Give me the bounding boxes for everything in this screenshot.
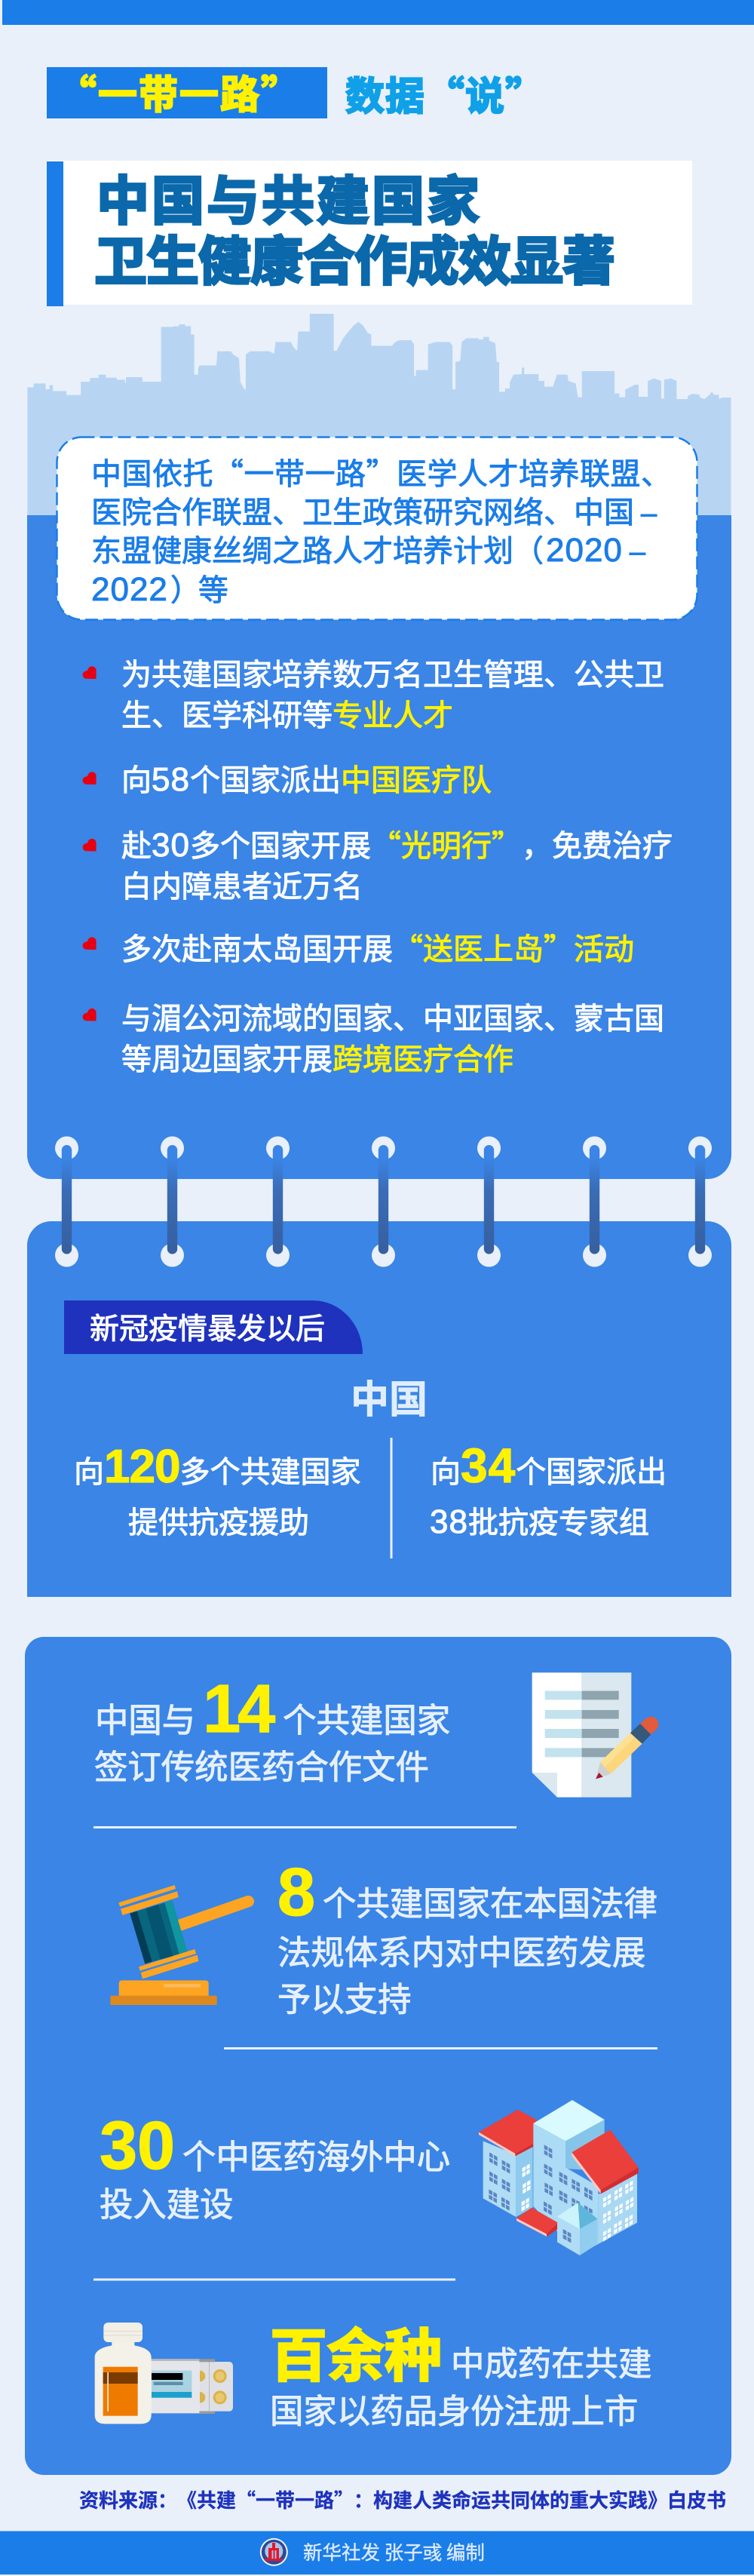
divider: [391, 1438, 392, 1558]
bullet 3 text: [121, 821, 673, 906]
bullet 3 text: 白内障患者近万名: [121, 862, 363, 906]
bullet 2 text: 向58个国家派出中国医疗队: [121, 756, 492, 800]
callout: dashed intro box: [57, 438, 697, 620]
callout: dashed intro box: 医院合作联盟、卫生政策研究网络、中国 –: [91, 488, 657, 532]
item: 14 countries text: 签订传统医药合作文件: [94, 1739, 429, 1788]
stat: 34 countries: 38批抗疫专家组: [430, 1498, 649, 1542]
item: 100+ medicines text: 中成药在共建: [451, 2336, 651, 2385]
bullet 1 text: 为共建国家培养数万名卫生管理、公共卫: [121, 650, 664, 694]
decorative rule 2: [224, 2047, 657, 2049]
item: 8 countries text: [277, 1855, 657, 2021]
city skyline: [27, 314, 731, 515]
panel 2: covid: [27, 1221, 731, 1597]
bullet 1 heart: [83, 666, 97, 679]
bullet 3 text: 赴30多个国家开展“光明行”，免费治疗: [121, 821, 673, 865]
stat: 120 countries: 向120多个共建国家: [74, 1441, 360, 1493]
item: 8 countries text: 8 个共建国家在本国法律: [277, 1855, 657, 1930]
item: 14 countries text: 中国与 14 个共建国家: [95, 1672, 450, 1747]
bullet 5 text: [121, 994, 664, 1079]
icon: xinhua logo: [260, 2538, 288, 2566]
bullet 5 text: 等周边国家开展跨境医疗合作: [121, 1035, 513, 1079]
item: 30 centres text: 30 个中医药海外中心: [100, 2108, 450, 2184]
panel 3: traditional medicine: [25, 1637, 731, 2475]
binder rings: [55, 1136, 712, 1267]
stat: 120 countries: 提供抗疫援助: [128, 1498, 309, 1542]
bullet 2 heart: [83, 772, 97, 784]
title line 2: 卫生健康合作成效显著: [94, 220, 615, 296]
stat: 34 countries: [430, 1438, 667, 1542]
item: 8 countries text: 法规体系内对中医药发展: [277, 1925, 645, 1974]
heading: China: 中国: [351, 1368, 428, 1424]
panel: medical cooperation: [27, 515, 731, 1179]
icon: document and pencil: [532, 1672, 658, 1798]
top bar: [2, 0, 754, 25]
title panel: [47, 159, 692, 306]
callout: dashed intro box: 2022）等: [91, 566, 228, 609]
icon: buildings: [479, 2100, 639, 2255]
label: since covid outbreak: 新冠疫情暴发以后: [90, 1306, 325, 1348]
title line 1: 中国与共建国家: [97, 159, 482, 235]
item: 30 centres text: 投入建设: [100, 2177, 234, 2226]
bullet list: [83, 650, 673, 1079]
icon: gavel: [110, 1885, 248, 2005]
item: 14 countries text: [94, 1672, 450, 1788]
item: 30 centres text: [100, 2108, 450, 2226]
item: 100+ medicines text: [270, 2310, 651, 2433]
bullet 1 text: 生、医学科研等专业人才: [121, 691, 453, 735]
callout: dashed intro box: 中国依托“一带一路”医学人才培养联盟、: [91, 450, 671, 493]
item: 100+ medicines text: 国家以药品身份注册上市: [270, 2384, 638, 2433]
credit text: 新华社发 张子彧 编制: [303, 2538, 485, 2565]
bullet 4 heart: [83, 937, 97, 950]
header tag: belt and road: “一带一路”: [57, 63, 302, 120]
label: since covid outbreak: [64, 1300, 363, 1354]
decorative rule 1: [93, 1826, 516, 1828]
bullet 3 heart: [83, 839, 97, 851]
stat: 120 countries: [74, 1441, 360, 1542]
item: 100+ medicines text: 百余种: [270, 2310, 442, 2393]
bullet 5 text: 与湄公河流域的国家、中亚国家、蒙古国: [121, 994, 664, 1038]
bullet 4 text: 多次赴南太岛国开展“送医上岛”活动: [121, 925, 634, 969]
header text: data speaks: 数据“说”: [345, 65, 545, 121]
item: 8 countries text: 予以支持: [277, 1972, 412, 2021]
icon: medicine bottle and blister pack: [95, 2323, 233, 2424]
bullet 1 text: [121, 650, 664, 735]
source note: 资料来源：《共建“一带一路”：构建人类命运共同体的重大实践》白皮书: [79, 2485, 726, 2513]
bullet 5 heart: [83, 1009, 97, 1021]
bottom bar: [0, 2531, 754, 2574]
decorative rule 3: [93, 2278, 455, 2281]
callout: dashed intro box: 东盟健康丝绸之路人才培养计划（2020 –: [91, 527, 646, 570]
stat: 34 countries: 向34个国家派出: [431, 1438, 667, 1493]
